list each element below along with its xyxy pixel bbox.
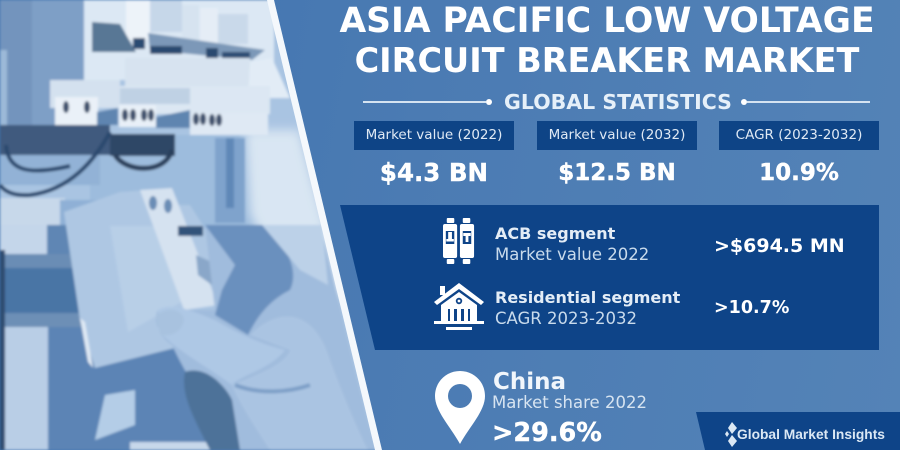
DIN rail area: [0, 225, 48, 255]
icon: breakers: [443, 218, 474, 264]
stat: market value 2032: [537, 121, 697, 186]
value: ACB: >$694.5 MN: [714, 235, 845, 257]
title: CIRCUIT BREAKER MARKET: [355, 41, 859, 80]
breaker handles: [92, 22, 136, 52]
hand: [173, 232, 373, 450]
stat: CAGR: CAGR (2023-2032): [736, 127, 862, 143]
icon: house: [434, 283, 484, 330]
icon: location pin: [435, 371, 485, 444]
text: market value 2022: Market value 2022: [495, 245, 649, 264]
value: China share: >29.6%: [492, 418, 602, 448]
stat: market value 2032: Market value (2032): [549, 127, 685, 143]
stat: market value 2022: $4.3 BN: [380, 158, 488, 187]
top panel body: [0, 0, 34, 127]
text: brand: Global Market Insights: [737, 427, 885, 442]
icon: logo diamonds: [725, 422, 737, 447]
stat: market value 2032: $12.5 BN: [558, 160, 676, 186]
logo: Global Market Insights: [696, 412, 900, 450]
wires: [0, 125, 110, 155]
text: CAGR period: CAGR 2023-2032: [495, 309, 637, 328]
stat: market value 2022: Market value (2022): [366, 127, 502, 143]
title: ASIA PACIFIC LOW VOLTAGE: [339, 1, 875, 41]
text: residential segment: Residential segment: [495, 288, 680, 307]
text: China: China: [493, 369, 566, 395]
panel: segments: [340, 205, 879, 350]
stat: CAGR: [719, 121, 879, 186]
stat: CAGR: 10.9%: [759, 160, 839, 186]
title: [339, 1, 875, 80]
heading: global statistics: GLOBAL STATISTICS: [504, 90, 732, 114]
photo: hand installing a circuit breaker in a panel: [0, 0, 375, 450]
text: market share: Market share 2022: [492, 393, 647, 412]
breaker module held: [64, 190, 204, 370]
heading: global statistics: [363, 90, 870, 114]
region under the strips: [90, 136, 252, 225]
value: residential: >10.7%: [714, 298, 789, 318]
white diagonal divider: [267, 0, 382, 450]
text: ACB segment: ACB segment: [495, 224, 615, 243]
stat: market value 2022: [354, 121, 514, 187]
terminal strips: [125, 58, 250, 88]
